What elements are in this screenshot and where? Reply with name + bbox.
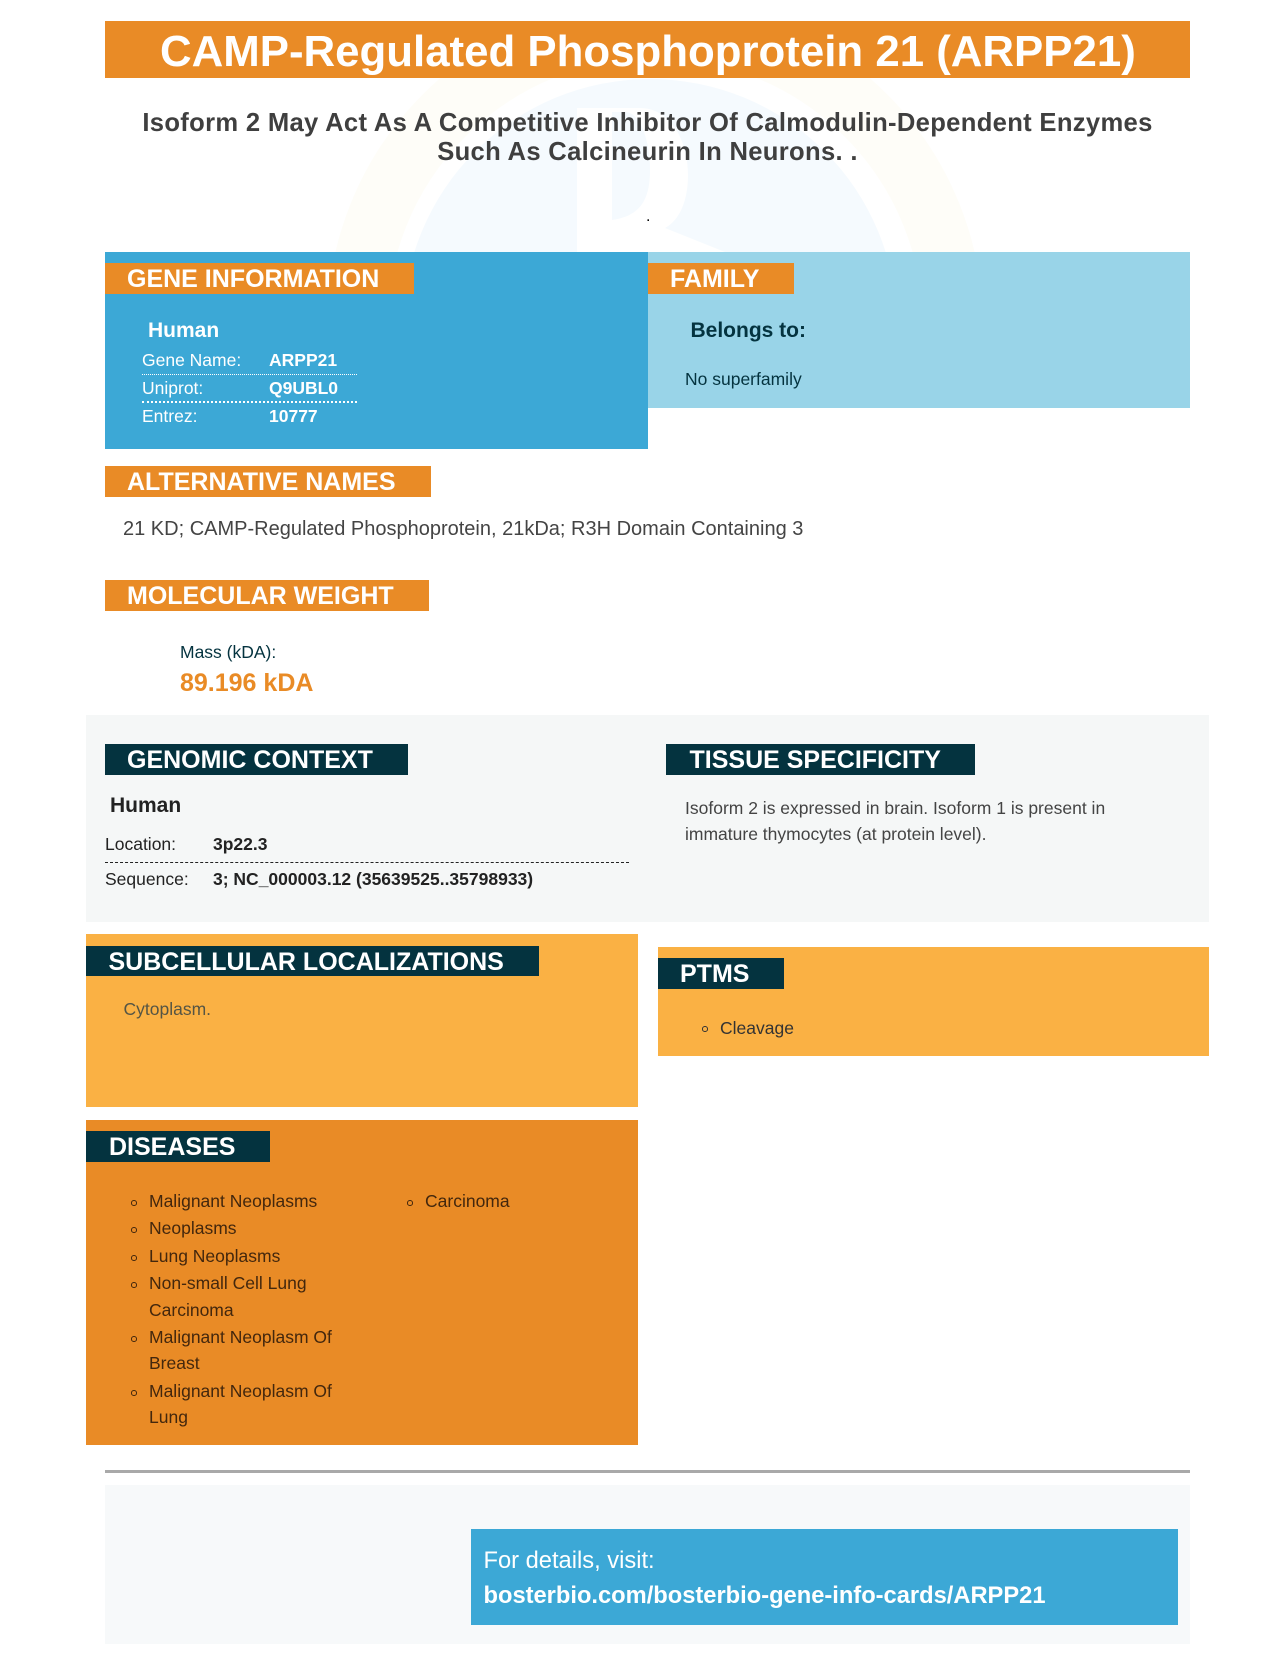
heading: family: FAMILY	[670, 264, 759, 292]
genomic table	[105, 834, 629, 889]
title text: CAMP-Regulated Phosphoprotein 21 (ARPP21)	[160, 27, 1136, 76]
footer panel	[105, 1485, 1190, 1644]
gene table	[142, 350, 357, 426]
panel: subcellular localizations	[86, 934, 638, 1107]
disease list: Neoplasms	[149, 1218, 237, 1238]
family value: No superfamily	[685, 369, 802, 389]
panel: gene information	[105, 252, 648, 449]
heading: genomic context: GENOMIC CONTEXT	[127, 746, 373, 774]
heading: diseases	[86, 1131, 270, 1162]
small dot: .	[646, 208, 650, 225]
heading: subcellular localizations: SUBCELLULAR LOCALIZATIONS	[108, 948, 504, 976]
subtitle: Such As Calcineurin In Neurons. .	[437, 138, 858, 166]
disease list: Malignant Neoplasms	[149, 1191, 317, 1211]
belongs to label: Belongs to:	[690, 319, 806, 342]
divider	[105, 1470, 1190, 1473]
species label: Human	[148, 319, 219, 342]
gene table: ARPP21	[269, 350, 337, 370]
heading: family	[648, 263, 794, 294]
heading: molecular weight: MOLECULAR WEIGHT	[127, 582, 394, 610]
call to action box	[471, 1529, 1178, 1625]
disease list: Lung Neoplasms	[149, 1246, 280, 1266]
gene table: 10777	[269, 406, 318, 426]
call to action label: For details, visit:	[484, 1548, 655, 1574]
alternative names text: 21 KD; CAMP-Regulated Phosphoprotein, 21kDa; R3H Domain Containing 3	[123, 518, 803, 540]
genomic table: Location:	[105, 834, 176, 854]
panel: ptms	[658, 947, 1209, 1056]
genomic table: 3p22.3	[213, 834, 267, 854]
gene table: Entrez:	[142, 406, 197, 426]
ptm list: Cleavage	[720, 1018, 794, 1038]
disease list: Carcinoma	[149, 1300, 234, 1320]
tissue specificity text	[685, 798, 1105, 844]
gene table: Q9UBL0	[269, 378, 338, 398]
title banner	[105, 21, 1190, 78]
disease list: Lung	[149, 1407, 188, 1427]
panel: family	[648, 252, 1190, 408]
heading: ptms: PTMS	[680, 960, 749, 988]
gene table: Uniprot:	[142, 378, 203, 398]
genomic table: 3; NC_000003.12 (35639525..35798933)	[213, 869, 533, 889]
disease list: Breast	[149, 1353, 200, 1373]
call to action link: bosterbio.com/bosterbio-gene-info-cards/ARPP21	[484, 1583, 1046, 1609]
disease list: Carcinoma	[425, 1191, 510, 1211]
mass label: Mass (kDA):	[180, 642, 276, 662]
disease list: Malignant Neoplasm Of	[149, 1381, 332, 1401]
heading: diseases: DISEASES	[109, 1132, 235, 1160]
heading: tissue specificity: TISSUE SPECIFICITY	[690, 746, 941, 774]
panel: diseases	[86, 1120, 638, 1445]
disease list: Non-small Cell Lung	[149, 1273, 307, 1293]
watermark logo	[414, 79, 886, 252]
mass value: 89.196 kDA	[180, 669, 313, 697]
subtitle: Isoform 2 May Act As A Competitive Inhibitor Of Calmodulin-Dependent Enzymes	[142, 109, 1153, 137]
genomic table: Sequence:	[105, 869, 189, 889]
tissue specificity text: Isoform 2 is expressed in brain. Isoform 1 is present in	[685, 798, 1105, 818]
heading: alternative names: ALTERNATIVE NAMES	[127, 468, 396, 496]
tissue specificity text: immature thymocytes (at protein level).	[685, 824, 986, 844]
panel: genomic context and tissue specificity	[86, 715, 1209, 922]
localization text: Cytoplasm.	[124, 999, 211, 1019]
gene table: Gene Name:	[142, 350, 241, 370]
disease list	[131, 1191, 510, 1427]
disease list: Malignant Neoplasm Of	[149, 1327, 332, 1347]
heading: gene information: GENE INFORMATION	[127, 264, 379, 292]
subtitle	[142, 109, 1153, 166]
species label: Human	[110, 794, 181, 817]
heading: ptms	[658, 958, 784, 989]
